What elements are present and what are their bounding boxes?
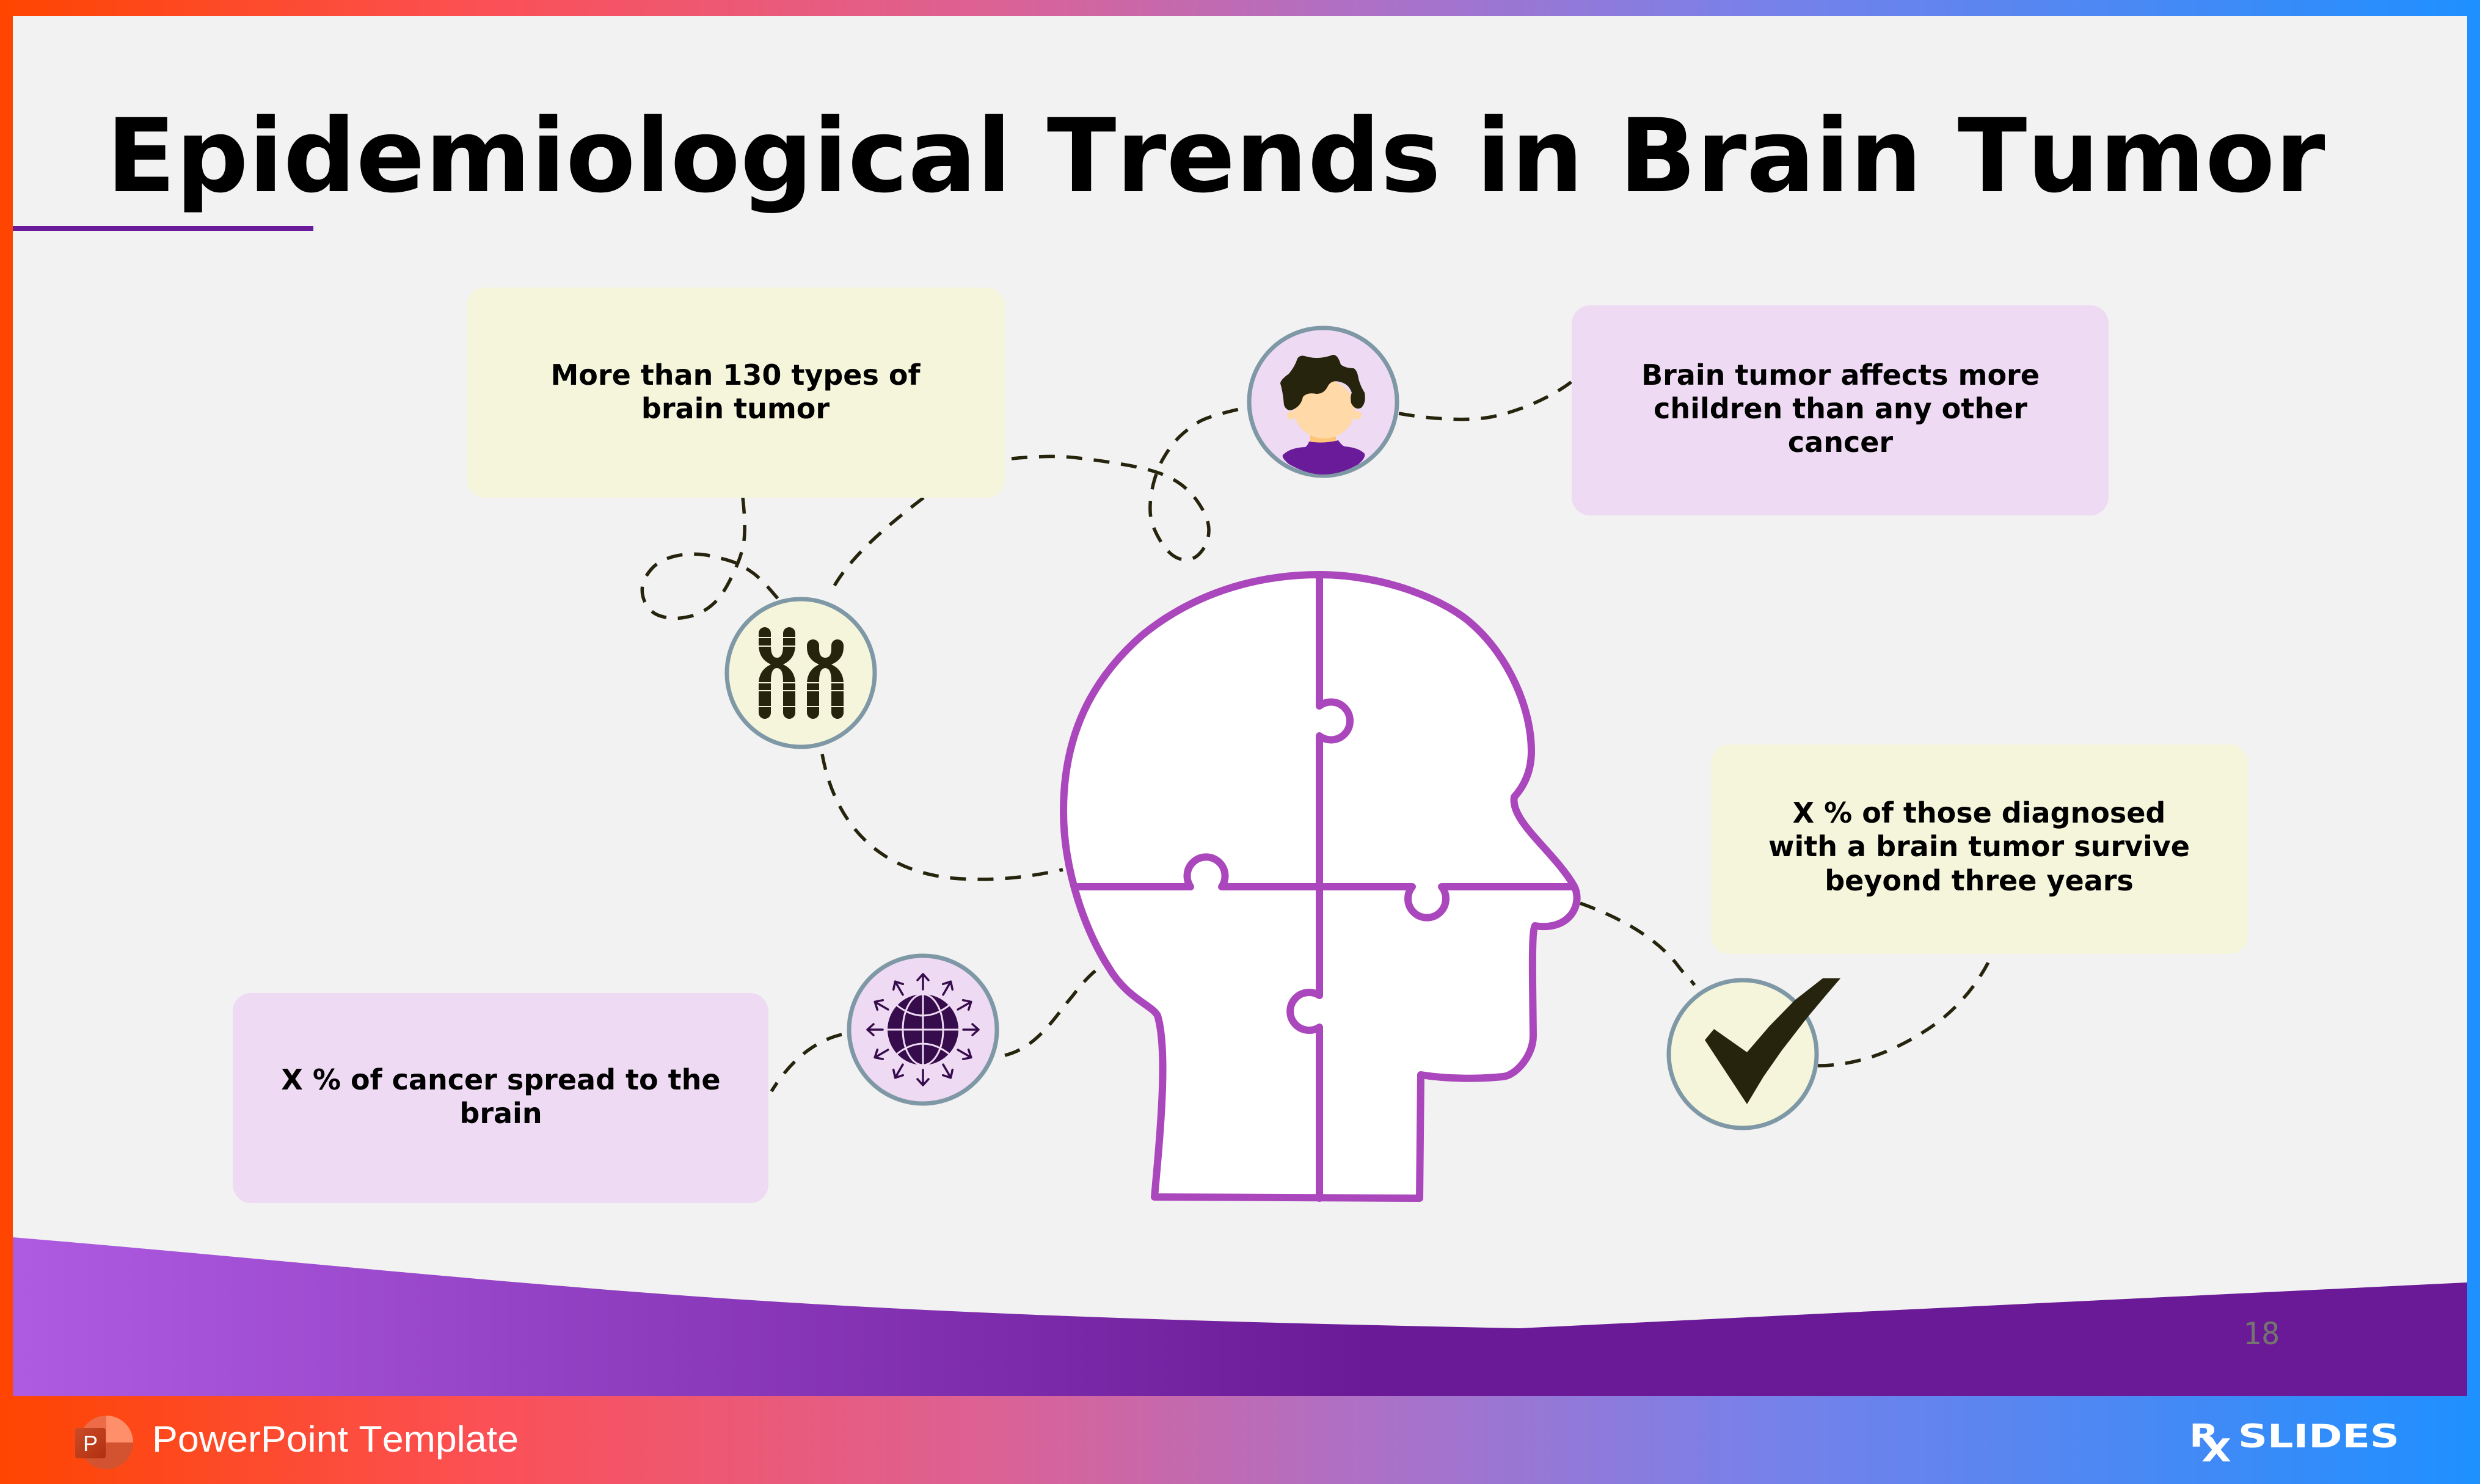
- panel: 130 types: [467, 288, 1005, 498]
- panel: spread: [233, 993, 768, 1203]
- title underline: [13, 226, 313, 231]
- logo: Rx Slides: [2189, 1418, 2399, 1469]
- panel: spread: X % of cancer spread to the: [281, 1063, 721, 1096]
- footer bar: [0, 1396, 2480, 1484]
- icon: PowerPoint logo: P: [83, 1431, 98, 1456]
- title: Epidemiological Trends in Brain Tumor: [106, 98, 2325, 216]
- purple wave: [13, 1237, 2467, 1396]
- page number: 18: [2243, 1316, 2280, 1351]
- panel: survival: X % of those diagnosed: [1793, 796, 2165, 829]
- right border: [2467, 0, 2480, 1484]
- icon: PowerPoint logo: [75, 1416, 133, 1469]
- panel: children: children than any other: [1654, 392, 2027, 425]
- logo: Rx Slides: R: [2189, 1418, 2219, 1455]
- footer label: PowerPoint Template: [152, 1419, 519, 1460]
- panel: children: cancer: [1788, 426, 1893, 459]
- icon: child: [1249, 328, 1397, 476]
- panel: spread: brain: [459, 1097, 542, 1130]
- left border: [0, 0, 13, 1484]
- icon: check mark: [1669, 978, 1840, 1128]
- icon: globe with arrows: [849, 956, 997, 1104]
- panel: children: Brain tumor affects more: [1641, 358, 2040, 391]
- panel: 130 types: brain tumor: [641, 392, 830, 425]
- logo: Rx Slides: SLIDES: [2238, 1418, 2399, 1455]
- panel: survival: beyond three years: [1825, 864, 2134, 897]
- logo: Rx Slides: X: [2201, 1433, 2231, 1469]
- panel: survival: with a brain tumor survive: [1768, 830, 2190, 863]
- top gradient bar: [0, 0, 2480, 16]
- dashed connectors: [642, 382, 1989, 1091]
- head puzzle illustration: [1063, 575, 1577, 1198]
- icon: chromosomes: [727, 599, 875, 747]
- panel: survival: [1711, 744, 2248, 954]
- panel: children: [1572, 305, 2109, 515]
- panel: 130 types: More than 130 types of: [551, 358, 921, 391]
